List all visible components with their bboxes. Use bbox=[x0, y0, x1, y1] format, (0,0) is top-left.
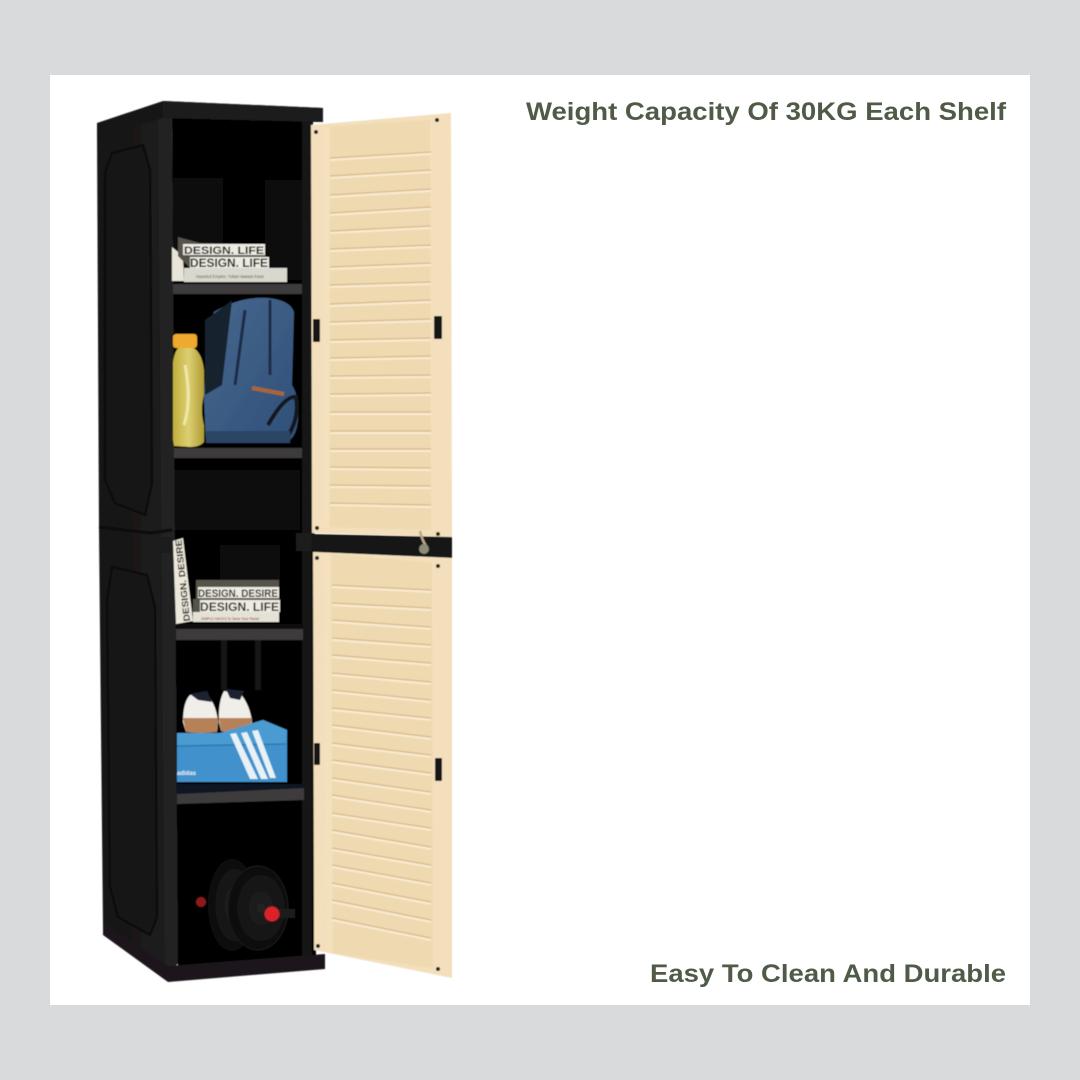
box stripes bbox=[230, 730, 276, 779]
books on top shelf: DESIGN. LIFE bbox=[184, 245, 264, 257]
cabinet side wall bbox=[97, 110, 180, 972]
cabinet interior bbox=[150, 112, 316, 970]
backpack bbox=[204, 298, 298, 443]
shelf 4 bbox=[177, 784, 304, 804]
upper door handles bbox=[313, 316, 442, 342]
upper door louvers bbox=[330, 152, 431, 505]
heading: easy to clean: Easy To Clean And Durable bbox=[650, 960, 1006, 988]
books on third shelf: DESIGN. DESIRE bbox=[173, 539, 192, 622]
lower door screws bbox=[315, 556, 440, 971]
cabinet base plinth bbox=[103, 922, 325, 982]
white panel bbox=[50, 75, 1030, 1005]
books on third shelf bbox=[173, 538, 280, 624]
books on top shelf bbox=[172, 237, 287, 282]
lower embossed side panel bbox=[107, 567, 157, 935]
door upper bbox=[311, 113, 452, 537]
upper door louvers highlight bbox=[330, 154, 431, 507]
blue shoe box bbox=[177, 720, 287, 782]
upper embossed side panel bbox=[105, 145, 152, 515]
weight plates bbox=[196, 859, 295, 951]
shelf 1 bbox=[173, 284, 302, 294]
books on top shelf: DESIGN. LIFE bbox=[190, 258, 268, 270]
lower door handles bbox=[314, 743, 442, 781]
blue shoe box: adidas bbox=[177, 771, 197, 777]
shelf 2 bbox=[174, 448, 302, 458]
door lower bbox=[313, 552, 452, 978]
heading: weight capacity: Weight Capacity Of 30KG Each Shelf bbox=[526, 98, 1007, 126]
shelf 3 bbox=[176, 624, 303, 640]
water bottle bbox=[173, 334, 204, 447]
cabinet top cap bbox=[97, 101, 323, 137]
lower door louvers highlight bbox=[332, 587, 431, 940]
door divider band bbox=[311, 534, 452, 558]
books on third shelf: DESIGN. DESIRE bbox=[198, 588, 278, 600]
door lock bbox=[419, 531, 429, 554]
books on top shelf: Haunted Empire: Yukari Iwatani Kane bbox=[196, 274, 264, 279]
books on third shelf: DESIGN. LIFE bbox=[200, 600, 279, 614]
cabinet product illustration bbox=[97, 101, 452, 982]
sneakers bbox=[183, 689, 252, 733]
books on third shelf: SIMPLE HACKS To Tame Your Planet bbox=[201, 616, 260, 621]
lower door louvers bbox=[332, 585, 431, 938]
upper door screws bbox=[314, 118, 440, 536]
